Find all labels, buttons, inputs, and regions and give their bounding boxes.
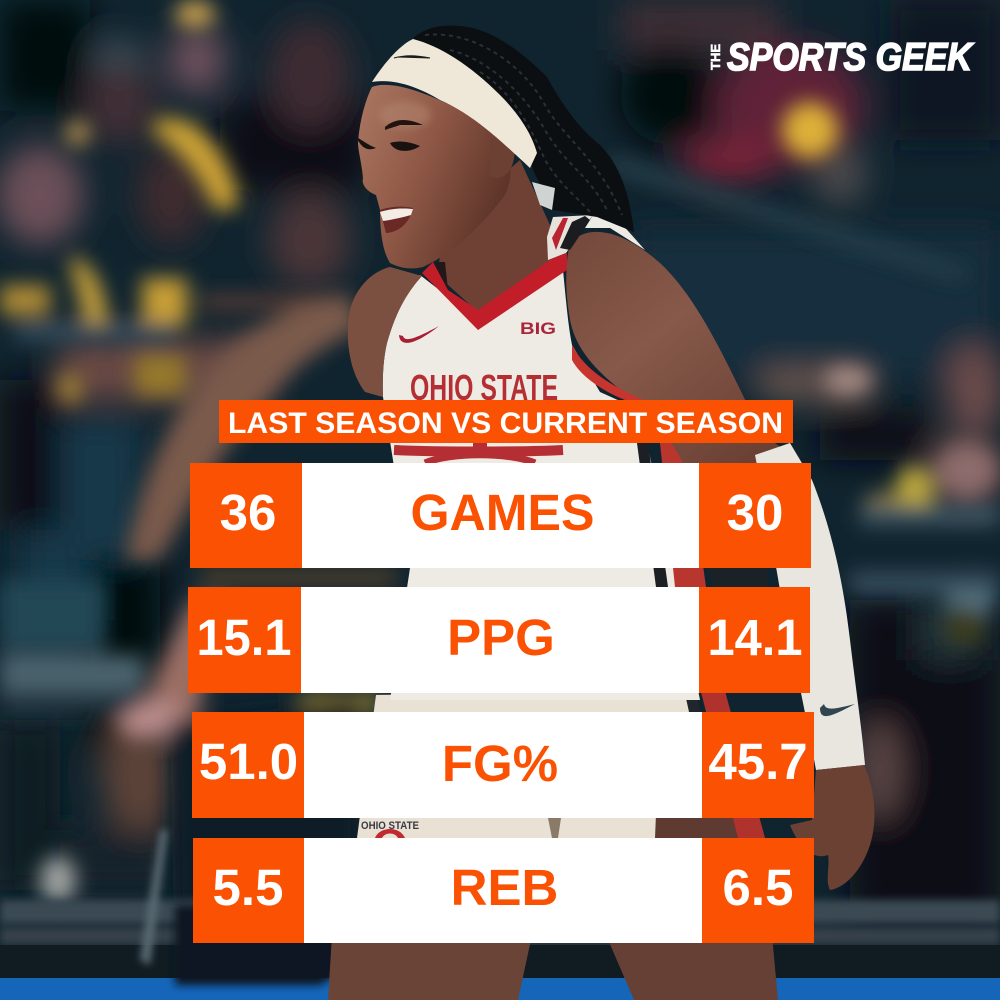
- row: fg percent: 51.0: [199, 733, 298, 790]
- brand logo: THE: [708, 44, 723, 70]
- row: ppg: 14.1: [708, 609, 802, 666]
- headband swoosh: [394, 56, 430, 58]
- face: [358, 85, 510, 268]
- shorts logo: [361, 820, 419, 838]
- inner leg skin: [655, 790, 745, 838]
- shorts side stripe: [698, 680, 765, 838]
- neck: [437, 160, 552, 312]
- row: ppg: [188, 587, 810, 693]
- BIG logo: BIG: [520, 319, 556, 338]
- row: rebounds: 5.5: [213, 859, 283, 916]
- mouth: [380, 207, 413, 233]
- row: games: 36: [220, 484, 276, 541]
- swoosh: [399, 326, 439, 343]
- row: games: GAMES: [410, 484, 594, 541]
- row: fg percent: FG%: [442, 735, 558, 792]
- right shoulder and arm: [566, 232, 800, 470]
- player shorts: [357, 690, 695, 838]
- hair tie: [532, 182, 555, 210]
- jersey armhole trim: [572, 345, 643, 400]
- jersey emblem: [394, 443, 563, 463]
- jersey wordmark: OHIO STATE: [410, 367, 558, 408]
- right sleeve: [755, 443, 865, 770]
- player legs: [328, 935, 778, 1000]
- dark side panel: [637, 443, 668, 587]
- row: rebounds: 6.5: [723, 859, 793, 916]
- row: ppg: 15.1: [196, 609, 292, 666]
- headband: [372, 39, 537, 168]
- brand logo: SPORTS GEEK: [727, 36, 974, 79]
- shorts logo: OHIO STATE: [361, 820, 419, 832]
- row: games: [190, 463, 811, 568]
- left shoulder: [348, 267, 422, 397]
- row: ppg: PPG: [447, 609, 555, 666]
- nike swoosh on sleeve: [820, 704, 855, 716]
- row: rebounds: [193, 838, 814, 943]
- photo: player: [328, 26, 875, 1000]
- braids: [413, 26, 634, 232]
- jersey neckline trim: [422, 253, 567, 330]
- row: fg percent: 45.7: [708, 733, 808, 790]
- right hand: [790, 765, 875, 890]
- row: games: 30: [727, 484, 783, 541]
- torso jersey: [383, 270, 700, 700]
- jersey strap white: [585, 215, 645, 250]
- shorts centre gap: [548, 818, 561, 838]
- eye and brow: [356, 120, 423, 151]
- heading bar: LAST SEASON VS CURRENT SEASON: [228, 407, 783, 440]
- row: fg percent: [192, 712, 814, 818]
- cheek highlight: [379, 101, 431, 129]
- jersey strap: [547, 215, 593, 260]
- row: rebounds: REB: [451, 859, 558, 916]
- ear: [490, 135, 515, 178]
